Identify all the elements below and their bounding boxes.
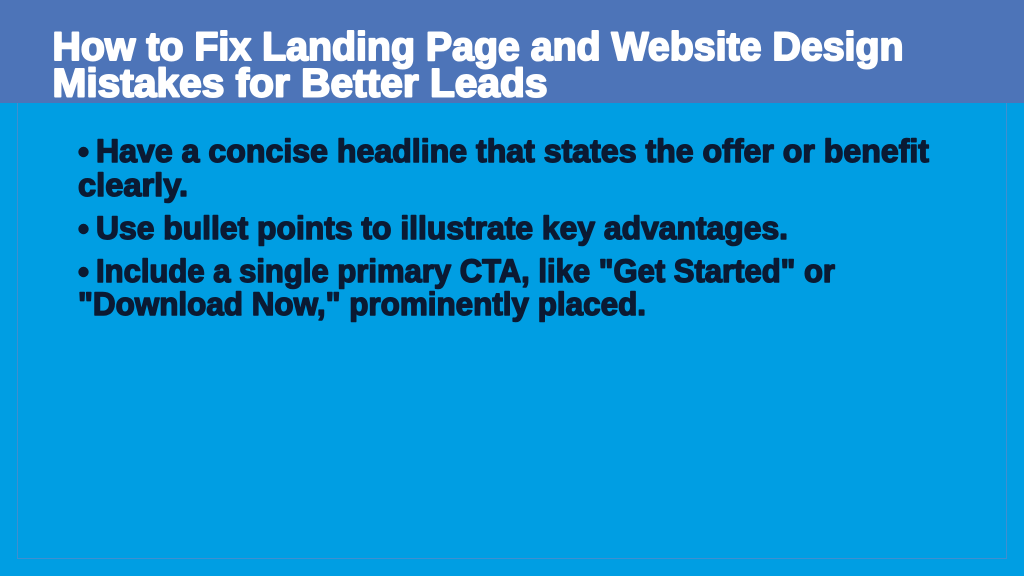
bullet 1: concise headline: clearly. (78, 167, 188, 203)
title: Mistakes for Better Leads (52, 62, 548, 106)
title: How to Fix Landing Page and Website Design (52, 25, 904, 69)
bullet 3: primary CTA: Include a single primary CTA, like "Get Started" or (96, 253, 835, 289)
header band (0, 0, 1024, 103)
bullet 3: primary CTA (78, 253, 835, 322)
title (52, 25, 904, 106)
bullet 2: key advantages: Use bullet points to illustrate key advantages. (96, 210, 788, 246)
bullet 1: concise headline (78, 133, 929, 203)
bullet list (78, 133, 929, 322)
bullet 1: concise headline: Have a concise headline that states the offer or benefit (96, 133, 929, 169)
bullet 3: primary CTA: "Download Now," prominently placed. (78, 286, 646, 322)
